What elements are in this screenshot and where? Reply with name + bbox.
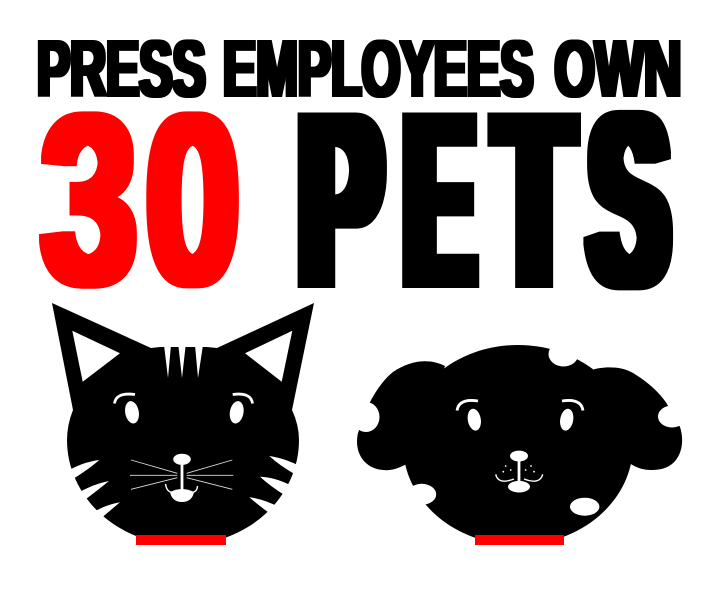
illustration: dog face [352, 342, 686, 545]
dog spot [570, 498, 599, 516]
headline word: pets: E [405, 62, 473, 337]
dog eyes [466, 408, 575, 432]
headline word: pets [299, 62, 668, 338]
headline word: pets: P [299, 64, 381, 338]
cat nose and mouth [166, 454, 198, 502]
cat whiskers [130, 460, 233, 489]
dog red collar [475, 535, 564, 545]
headline number: 30 [41, 66, 240, 334]
title: press employees own [37, 25, 682, 114]
dog eyebrows [457, 400, 583, 410]
headline word: pets: S [590, 62, 668, 337]
cat red collar [136, 535, 226, 545]
dog head and ears silhouette [357, 345, 682, 545]
dog muzzle dots [502, 465, 535, 473]
cat head silhouette [52, 303, 314, 545]
title: press employees own: EMPLOYEES [223, 25, 534, 114]
cat eyebrows [114, 394, 252, 404]
cat ears inner [72, 331, 292, 382]
cat forehead stripes [164, 345, 203, 378]
headline number: 30: 0 [146, 66, 240, 334]
headline word: pets: T [496, 64, 572, 337]
cat eyes [123, 400, 245, 425]
title: press employees own: OWN [554, 25, 682, 114]
headline number: 30: 3 [41, 67, 137, 334]
cat cheek stripes [64, 456, 302, 520]
dog nose and mouth [496, 451, 543, 493]
title: press employees own: PRESS [37, 25, 206, 114]
dog coat patches at edge [352, 342, 686, 505]
illustration: cat face [52, 303, 314, 545]
